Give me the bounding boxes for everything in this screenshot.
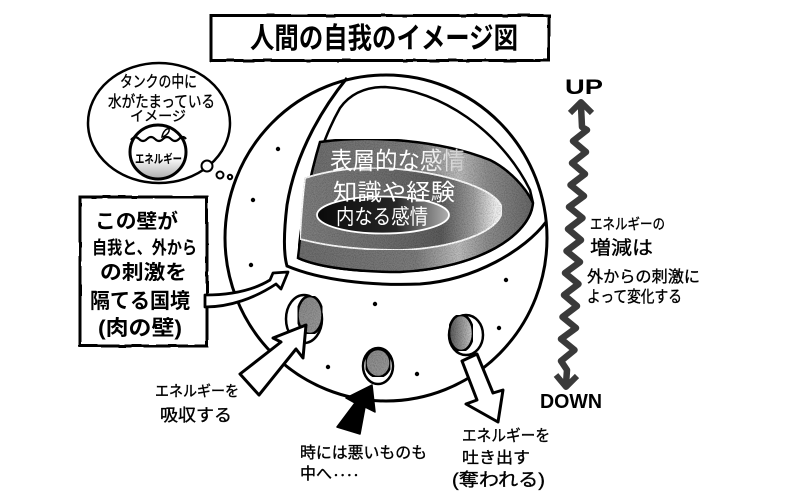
energy scale note: 外からの刺激に	[587, 268, 700, 286]
hole: left	[286, 295, 322, 343]
arrow: absorb energy	[240, 325, 306, 395]
outer layer: surface emotions	[298, 139, 533, 272]
middle layer: knowledge and experience	[300, 168, 502, 250]
label: release energy	[452, 427, 550, 490]
sphere body	[225, 75, 547, 401]
arrow: bad things coming in	[337, 385, 375, 434]
title: 人間の自我のイメージ図	[250, 22, 518, 55]
thought bubble	[88, 63, 232, 183]
window into the tank	[284, 78, 546, 284]
callout box: the wall	[80, 197, 207, 346]
arrow: wall to boundary	[205, 272, 288, 307]
label: release energy: (奪われる)	[452, 470, 545, 490]
title	[211, 16, 549, 60]
label: bad things coming in	[300, 444, 427, 483]
zigzag double arrow	[556, 102, 592, 387]
bubble caption: イメージ	[130, 108, 186, 124]
label: down: DOWN	[540, 391, 602, 413]
label: bad things coming in: ・・・・	[331, 471, 361, 482]
bubble trail circles	[202, 160, 232, 179]
label: knowledge and experience: 知識や経験	[333, 179, 455, 205]
energy scale note	[587, 216, 700, 306]
callout text: の刺激を	[100, 261, 187, 284]
icon: energy tank	[130, 125, 186, 179]
sphere dots	[249, 147, 508, 376]
bubble caption	[108, 73, 215, 124]
label: bad things coming in: 中へ	[300, 465, 332, 483]
icon: energy tank: エネルギー	[135, 152, 182, 166]
callout text: この壁が	[95, 209, 178, 233]
inner chamber outline	[298, 87, 533, 272]
inner layer: inner emotions	[317, 196, 449, 234]
callout text: (肉の壁)	[98, 317, 182, 340]
label: release energy: エネルギーを	[462, 427, 550, 445]
callout text	[90, 209, 197, 340]
label: absorb energy: 吸収する	[160, 406, 232, 425]
bubble caption: 水がたまっている	[108, 93, 215, 111]
callout text: 隔てる国境	[90, 290, 190, 313]
wall outline	[284, 78, 546, 284]
hole: middle	[363, 348, 393, 384]
label: surface emotions: 表層的な感情	[330, 148, 465, 175]
infographic	[78, 14, 699, 490]
up-down energy scale	[540, 76, 603, 413]
callout text: 自我と、外から	[92, 238, 197, 258]
bubble caption: タンクの中に	[120, 73, 197, 91]
hole: right	[449, 315, 483, 355]
label: absorb energy: エネルギーを	[155, 383, 239, 400]
label: inner emotions: 内なる感情	[336, 206, 428, 229]
energy scale note: よって変化する	[587, 288, 682, 306]
label: up: UP	[565, 76, 603, 99]
arrow: release energy	[462, 354, 503, 422]
energy scale note: エネルギーの	[590, 216, 665, 233]
energy scale note: 増減は	[590, 237, 653, 259]
label: absorb energy	[155, 383, 239, 425]
label: bad things coming in: 時には悪いものも	[300, 444, 427, 462]
label: release energy: 吐き出す	[462, 449, 530, 467]
